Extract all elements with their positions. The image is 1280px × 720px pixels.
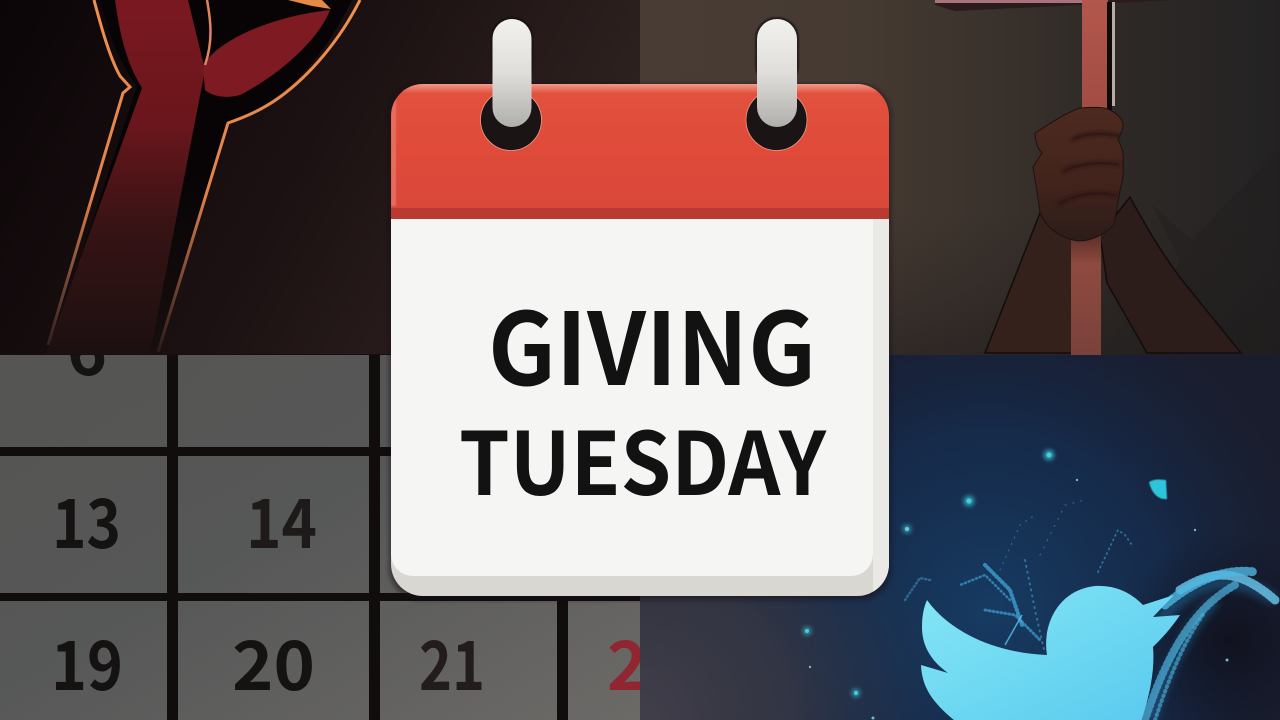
date: 14: 14: [246, 469, 317, 568]
date: 20: 20: [232, 611, 315, 710]
orange outline left: [48, 0, 130, 345]
right binding ring: [757, 19, 797, 127]
panel: hand holding protest sign: [640, 0, 1280, 355]
particle network streaks: [905, 500, 1275, 720]
date: 21: 21: [419, 611, 485, 710]
icon: blue bird: [921, 586, 1180, 720]
red calendar header: [391, 84, 889, 219]
panel: glowing network with bird: [640, 355, 1280, 720]
calendar shadow: [389, 84, 891, 600]
left forearm: [984, 212, 1071, 354]
gripping fist: [1033, 107, 1123, 241]
fist black shadow shape: [90, 0, 352, 290]
handle shadow strip: [1107, 2, 1112, 110]
swoosh glow: [1150, 583, 1275, 720]
left binding ring: [492, 19, 532, 127]
orange outline right: [158, 0, 360, 352]
title line 1: GIVING: [488, 269, 816, 414]
date: 6: 6: [67, 296, 107, 395]
right forearm: [1100, 197, 1241, 353]
background tent shape: [1140, 148, 1280, 355]
grid lines: [0, 355, 640, 720]
bright diagonal streak: [1005, 615, 1022, 645]
left header highlight: [391, 92, 396, 206]
upper sign handle: [1082, 0, 1108, 112]
handle highlight strip: [1112, 2, 1115, 106]
sign board: [935, 0, 1176, 11]
date: 13: 13: [52, 469, 121, 568]
raised arm: [46, 0, 205, 354]
glowing particles: [803, 450, 1228, 720]
header lower band: [391, 208, 889, 219]
panel: calendar month grid: [0, 355, 640, 720]
orange inner stroke: [205, 0, 210, 65]
sign board edge: [935, 0, 1085, 3]
date: 19: 19: [51, 611, 123, 710]
hand leaf shape: [203, 10, 330, 97]
right binding hole: [746, 90, 807, 150]
panel: raised fist illustration: [0, 0, 640, 354]
date: partial red 2: 2: [607, 611, 647, 710]
orange fingertip: [288, 0, 331, 9]
title line 2: TUESDAY: [459, 395, 827, 521]
title: Giving Tuesday: [459, 269, 827, 521]
left binding hole: [480, 90, 542, 150]
finger creases: [1058, 134, 1120, 205]
right ring shadow: [755, 17, 799, 87]
left ring shadow: [491, 17, 533, 87]
lower sign handle: [1071, 225, 1101, 355]
calendar icon: [389, 17, 891, 600]
icon: small glowing bird fragment: [1149, 480, 1167, 499]
right page edge: [873, 219, 889, 596]
page face: [391, 219, 873, 576]
calendar page: [391, 219, 889, 596]
